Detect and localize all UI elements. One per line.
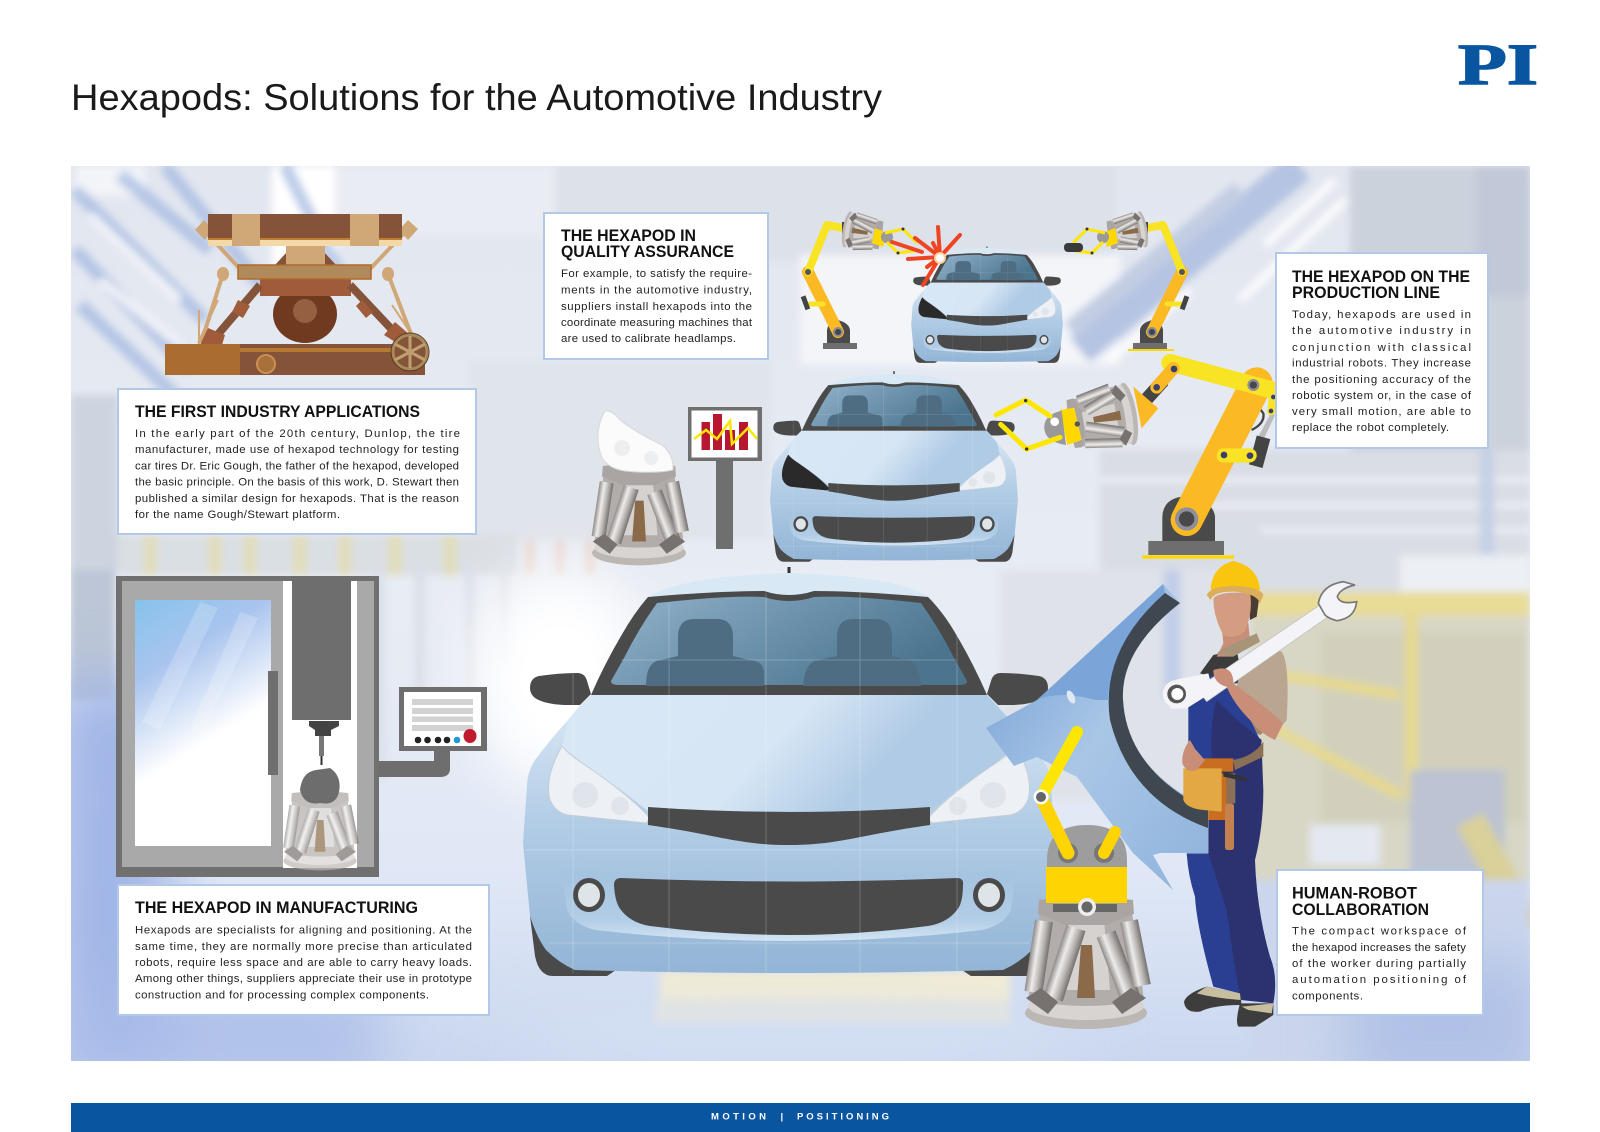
footer text: MOTION [711,1112,766,1122]
window [135,600,271,846]
hexapod with workpiece [283,768,359,870]
body text [1292,926,1467,1002]
body text: Today, hexapods are used in [1292,309,1471,321]
body text: coordinate measuring machines that [561,317,753,329]
illustration: welding robot left [801,210,920,349]
body text: The compact workspace of [1292,926,1467,938]
heading: THE HEXAPOD IN MANUFACTURING [135,899,418,917]
heading [1292,884,1429,919]
illustration: middle car [770,371,1018,562]
body text: ments in the automotive industry, [561,284,752,296]
footer text: POSITIONING [797,1112,889,1122]
body text: Hexapods are specialists for aligning and positioning. At the [135,924,472,936]
body text: are used to calibrate headlamps. [561,333,736,345]
body text: car tires Dr. Eric Gough, the father of the hexapod, developed [135,460,459,472]
panel: human-robot collaboration [1277,870,1483,1015]
body text: the basic principle. On the basis of this work, D. Stewart then [135,476,459,488]
body text: the positioning accuracy of the [1292,374,1471,386]
body text [561,268,753,345]
body text: for the name Gough/Stewart platform. [135,509,340,521]
illustration: fender [986,584,1208,890]
panel: the first industry applications [118,389,476,534]
body text: suppliers install hexapods into the [561,301,752,313]
illustration: large production robot [996,363,1278,559]
illustration: top car [911,246,1063,363]
heading: PRODUCTION LINE [1292,284,1440,302]
body text: manufacturer, made use of hexapod technology for testing [135,444,459,456]
panel: the hexapod in manufacturing [118,885,489,1015]
body text: the automotive industry in [1292,325,1471,337]
hexapod on robot wrist [1063,380,1142,456]
body text: construction and for processing complex components. [135,990,429,1002]
body text: conjunction with classical [1292,342,1471,354]
heading: COLLABORATION [1292,901,1429,919]
wrench [1163,582,1357,708]
heading: THE FIRST INDUSTRY APPLICATIONS [135,403,420,421]
footer band [71,1103,1530,1132]
heading: HUMAN-ROBOT [1292,884,1417,902]
body text: In the early part of the 20th century, Dunlop, the tire [135,428,460,440]
body text: industrial robots. They increase [1292,358,1471,370]
title: Hexapods: Solutions for the Automotive Industry [71,77,883,118]
body text: components. [1292,990,1363,1002]
illustration: large front car [523,567,1055,976]
heading: THE HEXAPOD ON THE [1292,268,1470,286]
body text: replace the robot completely. [1292,422,1449,434]
body text: automation positioning of [1292,974,1467,986]
body text [135,428,460,521]
body text: very small motion, are able to [1292,406,1471,418]
headlamp [598,411,673,472]
panel: the hexapod in quality assurance [544,213,768,359]
icon: welding sparks [892,227,960,285]
body text: robots, require less space and are able to carry heavy loads. [135,957,472,969]
heading [1292,268,1470,302]
body text [135,924,472,1002]
footer text: | [780,1112,783,1122]
footer text [711,1112,889,1122]
illustration: Gough tire-testing machine [165,214,429,375]
logo: PI: PI [1458,32,1538,97]
body text: published a similar design for hexapods. That is the reason [135,493,459,505]
body text: of the worker during partially [1292,958,1466,970]
background: blurred factory hall [50,166,1540,1090]
panel: the hexapod on the production line [1276,253,1488,448]
illustration: control panel [379,687,487,777]
body text: For example, to satisfy the require- [561,268,752,280]
illustration: worker with wrench [1163,561,1357,1027]
icon: measurement sign with chart [688,407,762,549]
body text: the hexapod increases the safety [1292,942,1466,954]
illustration: hexapod carrying headlamp [592,411,689,565]
body text: same time, they are normally more precise than articulated [135,941,472,953]
illustration: robot right [1064,210,1189,351]
heading: THE HEXAPOD IN [561,227,696,245]
illustration: machining cabinet [116,576,379,877]
body text: robotic system or, in the case of [1292,390,1472,402]
body text: Among other things, suppliers appreciate their use in prototype [135,973,472,985]
heading: QUALITY ASSURANCE [561,243,734,261]
heading [561,227,734,261]
body text [1292,309,1472,434]
illustration: hexapod with robot arm [1024,732,1151,1029]
gripper with fingers [996,399,1082,451]
